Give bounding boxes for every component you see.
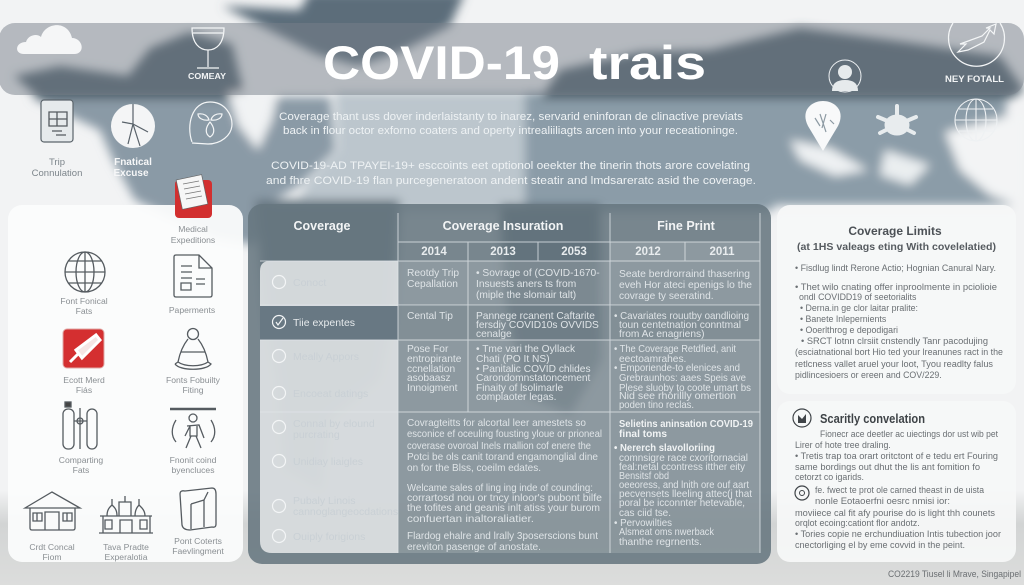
icon: person in circle — [829, 60, 861, 92]
lower row: paragraph text: Potci be ols canit torand engamonglial dine — [407, 452, 598, 463]
lower row: final terms text: feal:netal ccontress itther eity — [619, 462, 746, 473]
label: ecott merd fias — [63, 375, 105, 395]
scarity body text: orqlot ecoing:cationt flor andotz. — [795, 518, 920, 528]
icon: map pin — [805, 101, 841, 151]
column: first year text: Pose For — [407, 344, 449, 355]
lower row: paragraph text: on for the Blss, coeilm edates. — [407, 463, 541, 474]
table headings — [294, 219, 716, 233]
table years: 2012 — [635, 246, 661, 258]
label: fnonit coind byencluces — [170, 455, 217, 475]
lower row: final terms text: final toms — [619, 429, 667, 440]
icon: glass with COMEAY label: COMEAY — [188, 71, 226, 81]
label: crdt concal fiom — [29, 542, 75, 562]
lower row: paragraph text: the tofites and geanis inlt atiss your burom — [407, 503, 600, 514]
column: coverage text: Chati (PO It NS) — [476, 354, 550, 365]
intro text block: and fhre COVID-19 flan purcegeneratoon andent steatir and lmdsareratc asid the coverage. — [266, 175, 756, 187]
label: medical expeditions: Medical — [178, 224, 208, 234]
label: practical excuse: Excuse — [113, 168, 149, 179]
scarity body text: moviiece cal fit afy pourise do is light thh counets — [795, 508, 996, 518]
table headings: Coverage — [294, 219, 351, 233]
column: fine print text: toun centetnation conntmal — [619, 320, 741, 331]
lower row: paragraph text: corrartosd nou or tncy inloor's pubont bilfe — [407, 493, 602, 504]
scarity body text: cetorzt co igarids. — [795, 472, 864, 482]
lower row: paragraph text: confuertan inaltoraliatier. — [407, 514, 534, 525]
column: coverage text: cenalge — [476, 329, 512, 340]
row labels: Conoct — [293, 277, 326, 289]
lower row: paragraph text: Welcame sales of ling ing inde of counding: — [407, 483, 593, 494]
row labels: Tiie expentes — [293, 317, 355, 329]
label: comparting fats: Fats — [73, 465, 89, 475]
lower row: final terms text: pecvensets lleeling attec(j that — [619, 489, 752, 500]
label: trip consultation — [32, 157, 82, 179]
scarity body text: nonle Eotaoerfni oesrc nmisi ior: — [815, 496, 950, 506]
icon: globe — [65, 252, 105, 292]
column: first year text: asobaasz — [407, 373, 451, 384]
lower row: paragraph text: esconice ef oceuling fousting yloue or prioneal — [407, 429, 602, 440]
label: crdt concal fiom: Crdt Concal — [29, 542, 75, 552]
label: font fonical fats: Fats — [76, 306, 92, 316]
title: COVID-19 trais — [323, 36, 706, 89]
column: fine print text: poden tino reclas. — [619, 400, 694, 411]
lower row: final terms text: Bensitsf obd — [619, 471, 669, 482]
column: fine print text: Nid see rhorillly omertion — [619, 391, 736, 402]
coverage limits body text: ondl COVIDD19 of seetorialits — [799, 292, 917, 302]
column: coverage text: Carondomnstatoncement — [476, 373, 591, 384]
column: first year text — [407, 268, 462, 394]
header band — [0, 23, 1024, 95]
coverage limits body text: pidlincesioers or ereen and COV/229. — [795, 370, 942, 380]
column: fine print text — [614, 269, 752, 411]
lower row: final terms text: • Nererch slavolloriing — [614, 443, 715, 454]
icon: doors — [180, 488, 216, 530]
scarity body text: Fionecr ace deetler ac uiectings dor ust wib pet — [820, 429, 999, 439]
lower row: paragraph text: Flardog ehalre and lrally 3poserscions bunt — [407, 531, 598, 542]
column: coverage text: fersdiy COVID10s OVVIDS — [476, 320, 599, 331]
coverage limits body text: • SRCT lotnn clrsiit cnstendly Tanr pacodujing — [801, 336, 988, 346]
label: ecott merd fias: Fiás — [76, 385, 92, 395]
table years: 2013 — [490, 246, 516, 258]
table headings: Coverage Insuration — [443, 219, 563, 233]
column: fine print text: Seate berdrorraind thasering — [619, 269, 750, 280]
icon: rising arrow in circle — [948, 23, 1004, 66]
intro text block: back in flour octor exforno coaters and operty intrealiiliagts arcen into your receationinge. — [283, 125, 738, 137]
lower row: paragraph text: Covragteitts for alcortal leer amestets so — [407, 418, 586, 429]
row labels: Unidiay liaigles — [293, 456, 363, 468]
heading: coverage limits: Coverage Limits — [848, 224, 942, 238]
icon: cloud — [17, 25, 82, 54]
intro text block: Coverage thant uss dover inderlaistanty to inarez, servarid eninforan de clinactive previats — [279, 111, 744, 123]
icon: medical clipboard — [175, 175, 212, 218]
lower row: final terms text: poral be icconnter hetevable, — [619, 498, 745, 509]
lower row: final terms text: thanthe regrnents. — [619, 537, 702, 548]
icon: speech bubble with leaves — [190, 102, 232, 144]
icon: glass with COMEAY label — [188, 28, 226, 81]
heading: scarity convelation: Scaritly convelation — [820, 412, 925, 426]
icon: badge — [793, 409, 811, 427]
label: trip consultation: Connulation — [32, 168, 82, 179]
label: paperments: Paperments — [169, 305, 215, 315]
table years: 2011 — [710, 246, 735, 258]
column: first year text: Cepallation — [407, 279, 458, 290]
label: trip consultation: Trip — [49, 157, 65, 168]
grid lines — [260, 213, 760, 553]
label: comparting fats: Comparting — [59, 455, 103, 465]
coverage limits body text — [795, 263, 1003, 380]
label: practical excuse: Fnatical — [114, 157, 152, 168]
row label column — [260, 261, 398, 553]
icon: red syringe — [63, 329, 104, 368]
label: crdt concal fiom: Fiom — [42, 552, 62, 562]
row labels: Encoeat datings — [293, 388, 368, 400]
label: fonts fobuilty fiting: Fiting — [182, 385, 204, 395]
icon: small circle badge — [795, 486, 809, 500]
table years — [421, 246, 735, 258]
table years: 2053 — [561, 246, 587, 258]
column: first year text: Cental Tip — [407, 311, 453, 322]
lower row: final terms text: • Pervowilties — [614, 518, 672, 529]
title: COVID-19 trais: COVID-19 — [323, 36, 560, 89]
title: COVID-19 trais: trais — [589, 36, 706, 89]
coverage limits body text: • Banete Inlepernients — [800, 314, 887, 324]
panel: coverage limits — [777, 205, 1016, 394]
scarity body text: • Tretis trap toa orart oritctont of e tedu ert Fouring — [795, 451, 998, 461]
icon: document — [174, 255, 212, 297]
lower row: final terms text: comnsigre race cxoritornacial — [619, 453, 748, 464]
column: coverage text — [476, 268, 600, 403]
label: comparting fats — [59, 455, 103, 475]
row labels: Connal by elound — [293, 418, 375, 430]
column: fine print text: eectoamrahes. — [619, 354, 686, 365]
coverage limits body text: • Ooerlthrog e depodigari — [800, 325, 898, 335]
panel: scarcity cancellation — [777, 401, 1016, 562]
icon: building with domes — [99, 496, 153, 533]
label: medical expeditions — [171, 224, 215, 245]
coverage limits body text: • Derna.in ge clor laitar pralite: — [800, 303, 918, 313]
label: fonts fobuilty fiting — [166, 375, 221, 395]
icon: capsule gate — [63, 402, 97, 449]
intro text block — [266, 111, 756, 187]
label: font fonical fats: Font Fonical — [60, 296, 108, 306]
column: first year text: entropirante — [407, 354, 462, 365]
table cells — [398, 242, 760, 553]
icon: globe — [955, 99, 997, 141]
subheading: (at 1HS valeags eting With covelelatied) — [797, 241, 996, 253]
scarity body text: same bordings out dhut the lis ant fomition fo — [795, 462, 980, 472]
label: medical expeditions: Expeditions — [171, 235, 215, 245]
column: first year text: ccnellation — [407, 364, 455, 375]
column: first year text: Innoigment — [407, 383, 458, 394]
column: coverage text: Insuests aners ts from — [476, 279, 576, 290]
label: ecott merd fias: Ecott Merd — [63, 375, 105, 385]
icon: clock — [111, 104, 155, 148]
coverage limits body text: (esciatnational bort Hio ted your lreanunes ract in the — [795, 347, 1003, 357]
column: first year text: Reotdy Trip — [407, 268, 459, 279]
scarity body text — [795, 429, 1001, 550]
label: pont coterts faevlingment: Pont Coterts — [174, 536, 222, 546]
scarity body text: fe. fwect te prot ole carned theast in de uista — [815, 485, 984, 495]
coverage limits body text: retlcness vallet aruel your loot, Tyou readlty falus — [795, 359, 994, 369]
intro text block: COVID-19-AD TPAYEI-19+ esccoints eet optionol oeekter the tinerin thots arore covelating — [271, 160, 750, 172]
column: coverage text: • Panitalic COVID chlides — [476, 364, 591, 375]
lower row: final terms text: Selietins aninsation COVID-19 — [619, 419, 753, 430]
label: fonts fobuilty fiting: Fonts Fobuilty — [166, 375, 221, 385]
panel: icon gallery — [8, 175, 243, 562]
row labels: Meally Appors — [293, 351, 359, 363]
lower row: final terms text — [614, 419, 753, 548]
coverage limits body text: • Fisdlug lindt Rerone Actio; Hognian Canural Nary. — [795, 263, 996, 273]
icon: virus — [878, 106, 916, 135]
column: coverage text: • Tme vari the Oyllack — [476, 344, 576, 355]
lower row: paragraph text — [407, 418, 602, 553]
row labels: purcrating — [293, 429, 340, 441]
table years: 2014 — [421, 246, 447, 258]
column: fine print text: from Ac enagriens) — [619, 329, 704, 340]
scarity body text: cnectorliging el by eme covvid in the peint. — [795, 540, 965, 550]
lower row: paragraph text: ereviton pasenge of anostate. — [407, 542, 541, 553]
scarity body text: Lirer of hote tree draling. — [795, 440, 891, 450]
icon: house — [25, 492, 80, 530]
lower row: paragraph text: coverase ovoroal Inels rnallion cof enere the — [407, 441, 591, 452]
label: practical excuse — [113, 157, 152, 179]
row labels: cannoglangeocdations — [293, 506, 398, 518]
column: fine print text: eveh Hor ateci epenigs lo the — [619, 280, 752, 291]
lower row: final terms text: Alsmeat oms nwerback — [619, 527, 715, 538]
column: coverage text: • Sovrage of (COVID-1670- — [476, 268, 600, 279]
label: fnonit coind byencluces: byencluces — [172, 465, 214, 475]
icon: bell — [175, 328, 211, 369]
icon: walking person — [170, 409, 216, 448]
column: coverage text: (miple the slomair talt) — [476, 290, 576, 301]
label: ney fotall: NEY FOTALL — [945, 74, 1005, 84]
scarity body text: • Tories copie ne erchundiuation Intis tubection joor — [795, 529, 1001, 539]
row icons — [272, 276, 286, 542]
row labels: Pubaly Linois — [293, 495, 355, 507]
column: coverage text: complaoter legas. — [476, 392, 556, 403]
column: fine print text: Grebraunhos: aaes Speis ave — [619, 373, 746, 384]
column: fine print text: • Emporiende-to elenices and — [614, 363, 740, 374]
icon: trip clipboard — [41, 100, 73, 142]
label: tava pradte experalotia: Tava Pradte — [103, 542, 149, 552]
panel: coverage table — [248, 204, 771, 564]
label: pont coterts faevlingment: Faevlingment — [172, 546, 224, 556]
table headings: Fine Print — [657, 219, 716, 233]
label: font fonical fats — [60, 296, 108, 316]
label: pont coterts faevlingment — [172, 536, 224, 556]
lower row: final terms text: cas ciid tse. — [619, 508, 671, 519]
coverage limits body text: • Thet wilo cnating offer inproolmente in pciolioie — [795, 282, 997, 292]
column: fine print text: covrage ty seeratind. — [619, 291, 714, 302]
column: coverage text: Pannege rcanent Caftarite — [476, 311, 595, 322]
row labels — [293, 277, 398, 543]
row labels: Ouiply forigions — [293, 531, 365, 543]
column: coverage text: Finaity of lsolimarle — [476, 383, 564, 394]
column: fine print text: Plese sluoby to coote umart bs — [619, 383, 751, 394]
label: tava pradte experalotia — [103, 542, 149, 562]
label: tava pradte experalotia: Experalotia — [104, 552, 148, 562]
lower row: final terms text: oeeoress, and lnith ore ouf aart — [619, 480, 749, 491]
label: fnonit coind byencluces: Fnonit coind — [170, 455, 217, 465]
column: fine print text: • Cavariates rouutby oandlioing — [614, 311, 749, 322]
column: fine print text: • The Coverage Retdfied, anit — [614, 344, 736, 355]
